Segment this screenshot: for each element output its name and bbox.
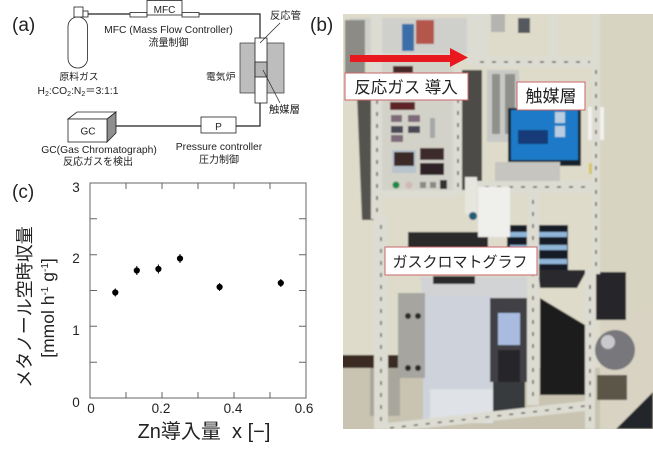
MFC caption: MFC (Mass Flow Controller) bbox=[104, 25, 233, 36]
y axis numbers bbox=[72, 180, 80, 410]
cylinder caption bbox=[38, 70, 119, 98]
small yellow tag bbox=[588, 162, 593, 175]
MFC caption bbox=[104, 25, 233, 49]
y axis numbers: 2 bbox=[72, 251, 80, 266]
x axis numbers: 0 bbox=[87, 401, 95, 416]
GC caption bbox=[41, 145, 157, 168]
cylinder caption: 2 bbox=[81, 91, 85, 98]
paper note bbox=[588, 107, 604, 140]
wall and floor bbox=[343, 14, 600, 368]
reaction tube label: 反応管 bbox=[270, 9, 301, 22]
x axis numbers bbox=[87, 401, 313, 416]
power strip bbox=[465, 177, 477, 214]
y axis title: [mmol h bbox=[38, 296, 58, 358]
catalyst furnace unit bbox=[487, 70, 519, 142]
GC box bbox=[68, 112, 116, 142]
upper shelf contents bbox=[350, 18, 468, 54]
pressure caption bbox=[176, 142, 263, 166]
y axis numbers: 0 bbox=[72, 395, 80, 410]
photo drawn with shapes bbox=[340, 10, 653, 435]
catalyst layer label bbox=[263, 70, 300, 116]
y axis title: ] bbox=[38, 258, 58, 263]
cylinder caption: H bbox=[38, 86, 45, 97]
label (c): (c) bbox=[12, 182, 34, 203]
paper sheet bbox=[478, 187, 510, 237]
y axis title: -1 bbox=[40, 286, 51, 296]
cylinder caption: ＝3:1:1 bbox=[85, 86, 119, 97]
valve box beside chromatograph bbox=[398, 293, 425, 378]
pressure controller box: P bbox=[215, 122, 222, 133]
shelf frame uprights bbox=[371, 14, 600, 432]
MFC caption: 流量制御 bbox=[148, 36, 188, 49]
x axis title: Zn導入量 x [−] bbox=[138, 420, 270, 443]
y axis title: -1 bbox=[40, 263, 51, 272]
data points bbox=[113, 254, 283, 296]
MFC box bbox=[130, 0, 199, 17]
GC caption: GC(Gas Chromatograph) bbox=[41, 145, 157, 156]
MFC box: MFC bbox=[154, 5, 175, 16]
catalyst layer label: 触媒層 bbox=[269, 103, 300, 116]
black PC tower bbox=[540, 298, 585, 395]
red arrow bbox=[350, 48, 468, 67]
cylinder caption: :N bbox=[71, 86, 81, 97]
y axis title: g bbox=[38, 272, 58, 287]
control panel rack bbox=[378, 60, 453, 192]
y axis title: メタノール空時収量 bbox=[15, 226, 35, 388]
x axis numbers: 0.6 bbox=[295, 401, 313, 416]
x axis numbers: 0.4 bbox=[224, 401, 243, 416]
icon: gas cylinder bbox=[68, 7, 88, 68]
y axis title bbox=[15, 226, 58, 388]
panel: (c) methanol yield chart bbox=[12, 180, 313, 443]
monitor bbox=[508, 108, 581, 166]
callout: gas chromatograph: ガスクロマトグラフ bbox=[392, 254, 528, 271]
cylinder caption: 原料ガス bbox=[59, 70, 99, 83]
y axis numbers: 1 bbox=[72, 323, 80, 338]
cables and cloth below monitor bbox=[495, 162, 560, 182]
furnace label: 電気炉 bbox=[206, 70, 236, 83]
callout: catalyst layer bbox=[517, 82, 585, 110]
frame slot marks bbox=[377, 62, 596, 428]
panel: (b) photo of apparatus bbox=[310, 10, 653, 435]
pressure caption: Pressure controller bbox=[176, 142, 263, 153]
label (b): (b) bbox=[310, 15, 333, 36]
callout: reaction gas inlet bbox=[345, 73, 468, 100]
gas chromatograph bbox=[420, 277, 527, 298]
dark box behind gas chromatograph bbox=[407, 231, 489, 246]
pressure caption: 圧力制御 bbox=[199, 153, 239, 166]
electric furnace and reaction tube bbox=[240, 38, 284, 103]
cylinder caption: 2 bbox=[67, 91, 71, 98]
reaction tube label bbox=[260, 9, 301, 43]
dark rack side bbox=[357, 95, 374, 220]
panel: (a) flow diagram bbox=[12, 0, 301, 168]
gas lines bbox=[88, 14, 260, 126]
GC box: GC bbox=[80, 126, 96, 138]
laptop bbox=[507, 225, 568, 270]
x axis numbers: 0.2 bbox=[152, 401, 170, 416]
callout: reaction gas inlet: 反応ガス 導入 bbox=[354, 78, 458, 97]
y axis numbers: 3 bbox=[72, 180, 80, 195]
GC caption: 反応ガスを検出 bbox=[63, 155, 133, 168]
cylinder caption: 2 bbox=[45, 91, 49, 98]
callout: catalyst layer: 触媒層 bbox=[526, 87, 576, 106]
pressure controller box bbox=[201, 117, 236, 133]
cylinder caption: :CO bbox=[49, 86, 67, 97]
label (a): (a) bbox=[12, 15, 35, 36]
pump and tank bbox=[596, 272, 626, 320]
callout: gas chromatograph bbox=[385, 247, 537, 275]
plot frame and ticks bbox=[90, 183, 306, 398]
